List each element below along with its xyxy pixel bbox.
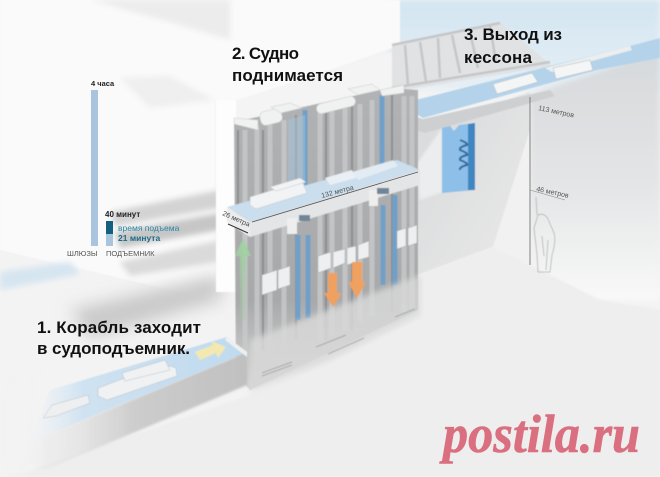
label: rise time: время подъема: [118, 223, 180, 233]
main tower: [234, 84, 420, 392]
heading: step 1: в судоподъемник.: [37, 339, 190, 358]
right wall: [418, 92, 530, 275]
bottom rails: [262, 309, 415, 376]
ships on upper canal: [493, 60, 593, 94]
heading: step 1: 1. Корабль заходит: [37, 318, 201, 337]
caisson with ships: [227, 160, 420, 237]
sky: [390, 0, 660, 90]
top pulleys: [234, 84, 404, 130]
watermark: postila.ru: [439, 404, 640, 464]
shaft shadows: [238, 95, 392, 350]
lower canal: [20, 337, 247, 470]
bar: lift total: [106, 221, 113, 246]
cruise ship: [250, 178, 307, 209]
label: locks axis: ШЛЮЗЫ: [67, 249, 98, 258]
icon: statue of liberty: [534, 197, 555, 272]
wall corner: [493, 130, 530, 265]
heading: step 2: 2. Судно: [232, 44, 299, 63]
heading: step 3: 3. Выход из: [464, 25, 562, 44]
yellow arrow: [195, 341, 226, 360]
truss backing: [392, 22, 552, 92]
orange arrow down left: [324, 273, 342, 307]
floor: [0, 247, 660, 477]
upper canal: [400, 38, 660, 133]
heading: step 2: поднимается: [232, 66, 343, 85]
dimension: 132 meters: [252, 172, 418, 222]
label: 21 minutes: 21 минута: [118, 233, 160, 243]
pier top: [236, 50, 400, 125]
distant hillside: [530, 50, 660, 300]
label: 4 hours: 4 часа: [91, 79, 115, 88]
label: 40 minutes: 40 минут: [105, 210, 140, 219]
inset connector: [416, 128, 442, 200]
cruise ship: [98, 360, 177, 400]
label: lift axis: ПОДЪЕМНИК: [106, 249, 155, 258]
dimension: 113 meters: 113 метров: [538, 105, 575, 120]
truss over the top: [392, 23, 550, 88]
second ship: [325, 160, 398, 185]
pier front: [216, 100, 236, 292]
inset: blue chamber detail: [442, 123, 475, 193]
shaft stripes: [245, 96, 412, 380]
fade over left edge of canal: [0, 360, 40, 477]
heading: step 3: кессона: [464, 48, 533, 67]
support blocks: [287, 218, 297, 234]
orange arrow down right: [348, 262, 366, 298]
dimension: 46 meters: 46 метров: [536, 186, 570, 200]
green arrow up: [235, 239, 251, 320]
bar: lift rise: [106, 221, 113, 234]
chart: time comparison: [67, 79, 180, 258]
upper-left walls: [0, 0, 400, 338]
small ship: [43, 395, 90, 418]
counterweight boxes: [262, 225, 417, 295]
dimension: 26 meters: 26 метра: [221, 210, 251, 229]
pipes: [298, 95, 395, 320]
bar: locks: [91, 90, 98, 246]
pale glass: [288, 115, 305, 190]
bottom mist: [250, 275, 420, 392]
dimension: 132 meters: 132 метра: [321, 185, 355, 200]
